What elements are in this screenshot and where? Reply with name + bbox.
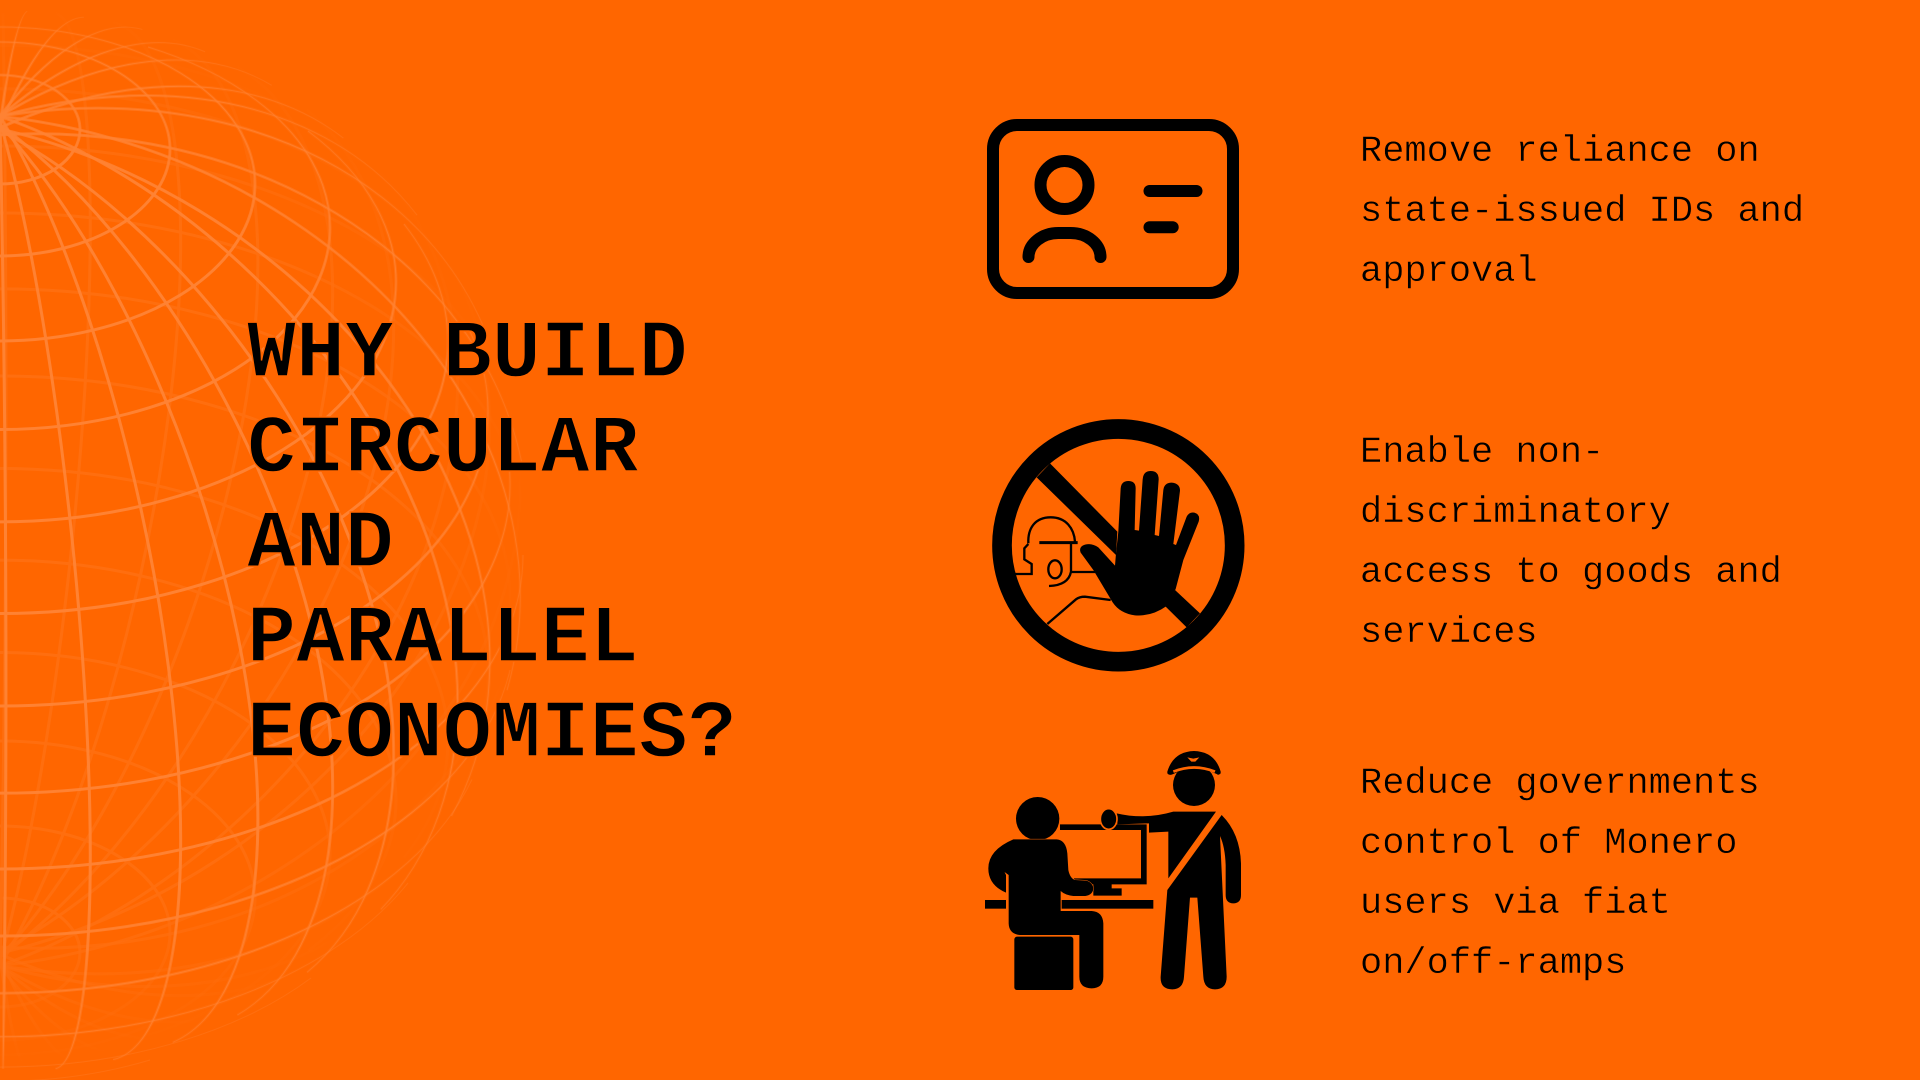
text block: remove reliance: Remove reliance on state-issued IDs and approval [1360, 131, 1804, 293]
text block: non-discriminatory access: Enable non- discriminatory access to goods and services [1360, 432, 1782, 654]
title: WHY BUILD CIRCULAR AND PARALLEL ECONOMIES? [247, 308, 737, 780]
text block: reduce government control: Reduce governments control of Monero users via fiat on/off-ramps [1360, 763, 1760, 985]
